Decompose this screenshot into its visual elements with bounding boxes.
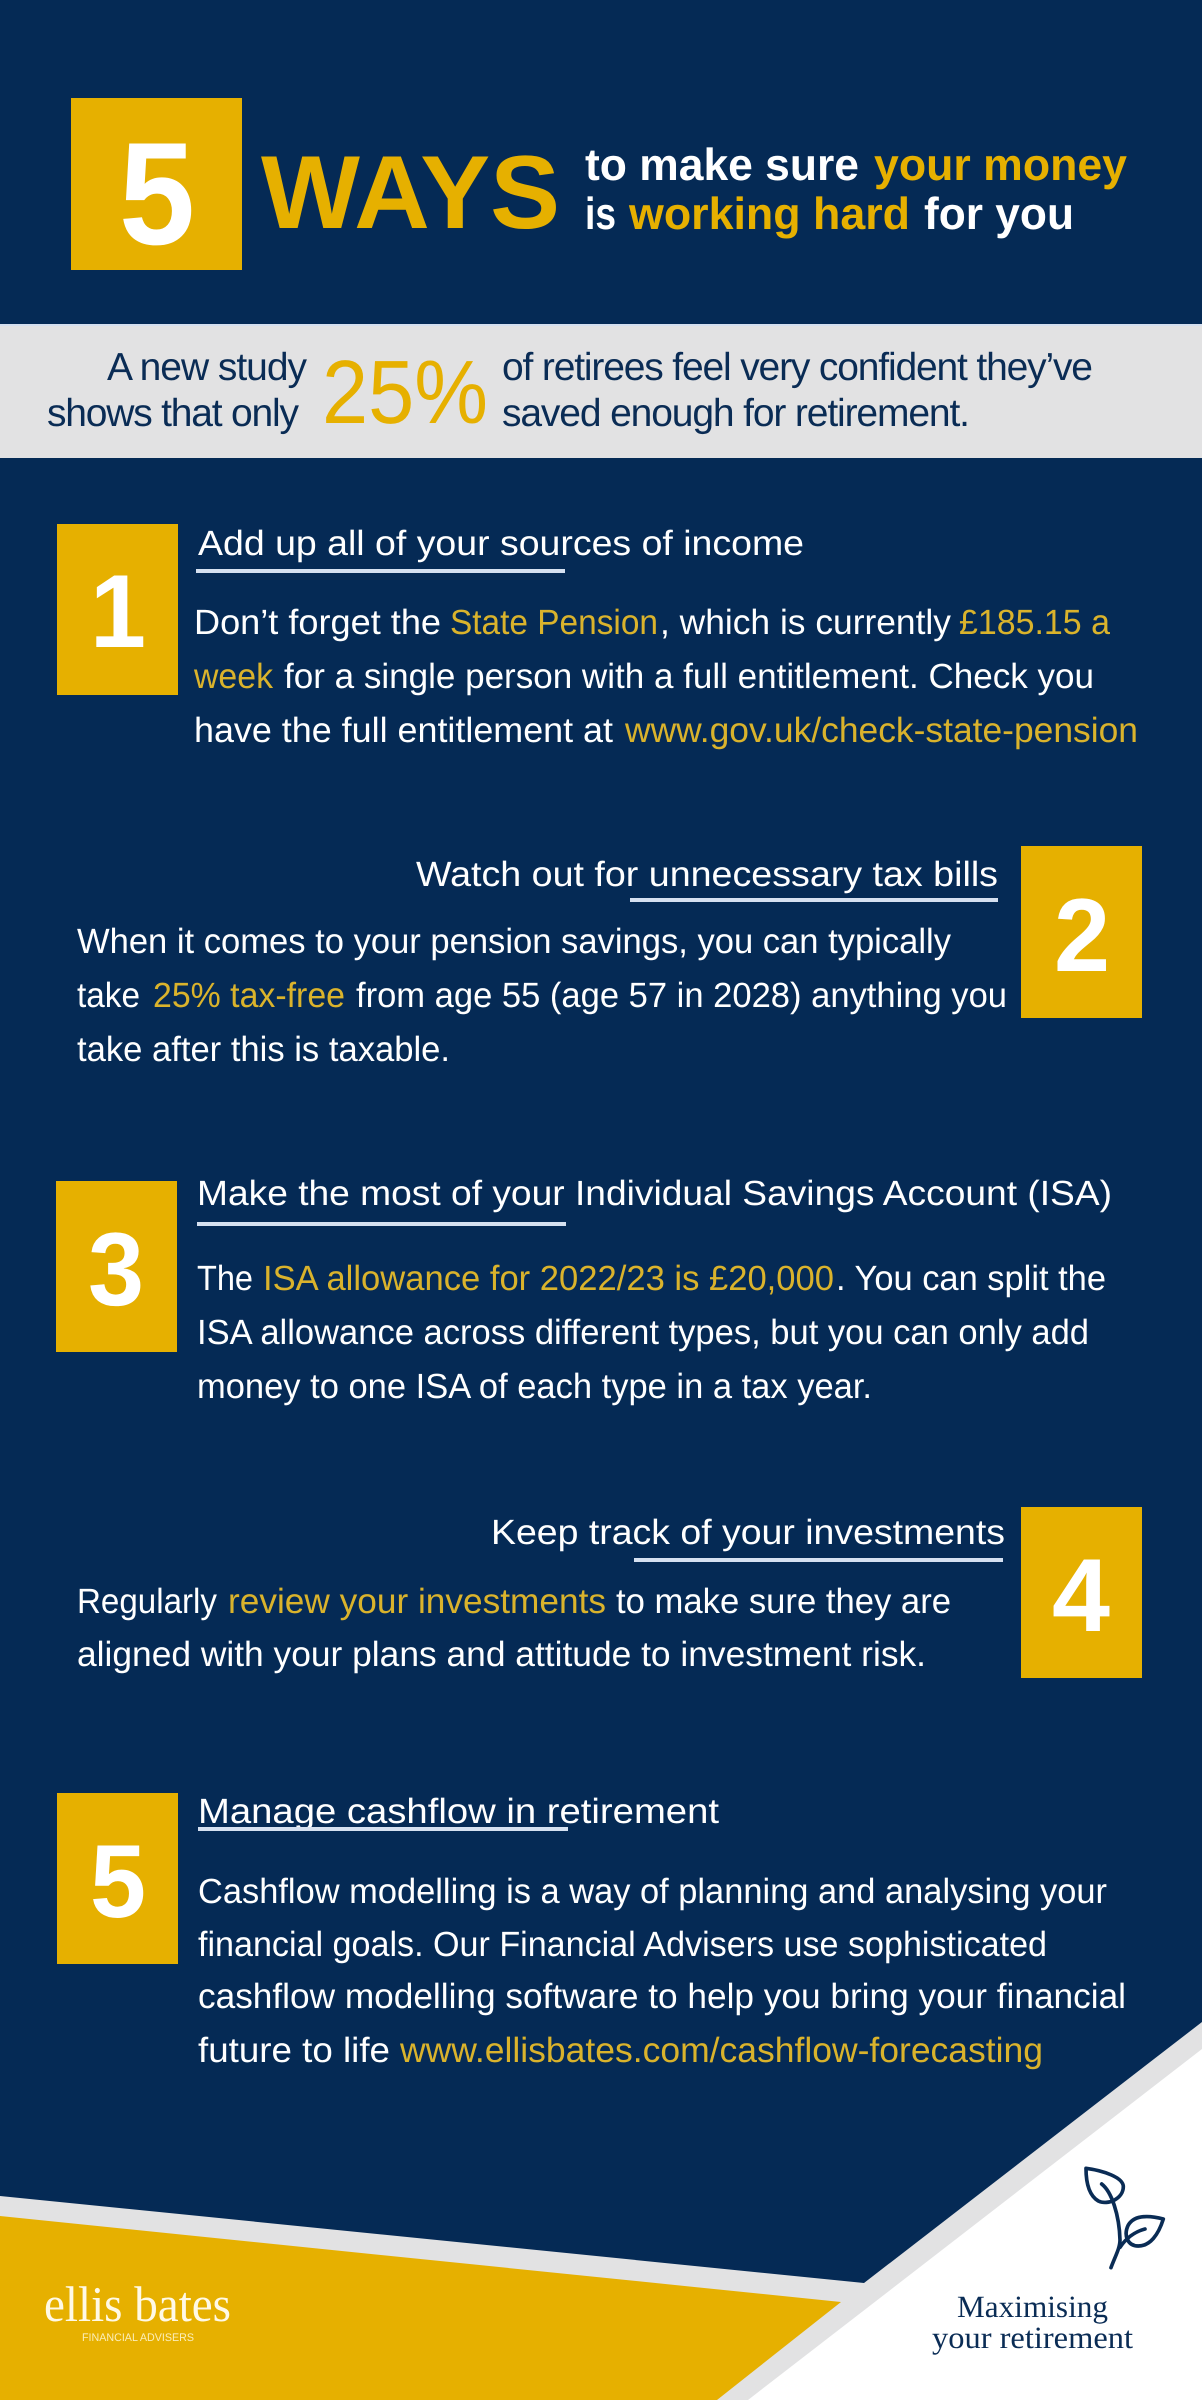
body text 1: £185.15 a	[959, 603, 1111, 642]
number block 1: 1	[90, 554, 146, 670]
body text 3	[197, 1259, 1106, 1406]
number block 2	[1021, 846, 1142, 1018]
heading underline 3	[197, 1222, 566, 1226]
statistic: 25%: 25%	[322, 343, 488, 443]
body text 1	[193, 603, 1138, 750]
body text 2: from age 55 (age 57 in 2028) anything you	[356, 976, 1007, 1015]
number block 3	[56, 1181, 177, 1352]
title	[71, 98, 1127, 275]
body text 4: aligned with your plans and attitude to investment risk.	[77, 1635, 926, 1674]
title tagline: is	[585, 188, 616, 239]
tagline: Maximising your retirement: your retirement	[932, 2320, 1133, 2355]
footer	[0, 2022, 1202, 2400]
title tagline	[585, 139, 1127, 239]
body text 3: ISA allowance for 2022/23 is £20,000	[263, 1259, 834, 1298]
title tagline: for you	[924, 188, 1074, 239]
statistic lead-in text: A new study	[107, 346, 308, 389]
body text 2: When it comes to your pension savings, you can typically	[77, 922, 951, 961]
number block 2: 2	[1054, 878, 1110, 994]
body text 5: Cashflow modelling is a way of planning and analysing your	[198, 1872, 1107, 1911]
heading underline 5	[198, 1827, 568, 1831]
heading 2: Watch out for unnecessary tax bills	[416, 855, 998, 894]
number block 4	[1021, 1507, 1142, 1678]
footer yellow panel	[0, 2216, 841, 2400]
number block 5: 5	[90, 1824, 146, 1940]
panel: way 2	[77, 846, 1142, 1069]
body text 2: take	[77, 976, 140, 1015]
title number block	[71, 98, 242, 275]
number block 5	[57, 1793, 178, 1964]
tagline: Maximising your retirement: Maximising	[957, 2289, 1108, 2324]
title word: WAYS: WAYS	[261, 135, 560, 251]
body text 3: money to one ISA of each type in a tax year.	[197, 1367, 872, 1406]
number block 3: 3	[88, 1212, 144, 1328]
panel: way 4	[77, 1507, 1142, 1678]
tagline: Maximising your retirement	[932, 2289, 1133, 2355]
body text 1: www.gov.uk/check-state-pension	[624, 711, 1138, 750]
panel: way 1	[57, 524, 1138, 750]
body text 1: have the full entitlement at	[194, 711, 613, 750]
statistic lead-in text	[47, 346, 308, 435]
body text 4: Regularly	[77, 1582, 217, 1621]
statistic follow-on text	[502, 346, 1093, 435]
body text 5	[198, 1872, 1126, 2070]
body text 5: financial goals. Our Financial Advisers use sophisticated	[198, 1925, 1047, 1964]
number block 4: 4	[1052, 1538, 1110, 1654]
body text 3: . You can split the	[836, 1259, 1106, 1298]
title tagline: to make sure	[585, 139, 859, 190]
body text 4	[77, 1582, 951, 1674]
body text 5: cashflow modelling software to help you bring your financial	[198, 1977, 1126, 2016]
body text 2	[77, 922, 1007, 1069]
statistic follow-on text: saved enough for retirement.	[502, 392, 970, 435]
body text 2: 25% tax-free	[153, 976, 345, 1015]
number block 1	[57, 524, 178, 695]
panel: statistic band	[0, 324, 1202, 458]
body text 3: ISA allowance across different types, but you can only add	[197, 1313, 1089, 1352]
body text 1: Don’t forget the	[194, 603, 441, 642]
logo: ellis bates: ellis bates	[44, 2276, 231, 2332]
heading 5: Manage cashflow in retirement	[198, 1792, 719, 1831]
body text 5: www.ellisbates.com/cashflow-forecasting	[399, 2031, 1043, 2070]
heading 4: Keep track of your investments	[491, 1513, 1005, 1552]
body text 4: to make sure they are	[616, 1582, 951, 1621]
body text 1: State Pension	[450, 603, 658, 642]
heading underline 4	[634, 1558, 1003, 1562]
body text 4: review your investments	[228, 1582, 606, 1621]
heading underline 2	[630, 898, 998, 902]
icon: sprouting plant	[1086, 2168, 1163, 2268]
statistic follow-on text: of retirees feel very confident they’ve	[502, 346, 1093, 389]
body text 3: The	[197, 1259, 253, 1298]
panel: way 5	[57, 1792, 1126, 2070]
body text 1: for a single person with a full entitlement. Check you	[284, 657, 1094, 696]
body text 1: week	[193, 657, 273, 696]
title number block: 5	[119, 112, 195, 275]
logo: ellis bates: FINANCIAL ADVISERS	[82, 2332, 194, 2344]
heading underline 1	[196, 569, 565, 573]
body text 1: , which is currently	[660, 603, 951, 642]
heading 3: Make the most of your Individual Savings Account (ISA)	[197, 1174, 1112, 1213]
title tagline: your money	[874, 139, 1127, 190]
panel: way 3	[56, 1174, 1112, 1406]
title tagline: working hard	[628, 188, 910, 239]
statistic lead-in text: shows that only	[47, 392, 300, 435]
body text 5: future to life	[198, 2031, 390, 2070]
body text 2: take after this is taxable.	[77, 1030, 450, 1069]
heading 1: Add up all of your sources of income	[198, 524, 804, 563]
footer white corner	[748, 2049, 1202, 2400]
footer grey band	[0, 2022, 1202, 2400]
